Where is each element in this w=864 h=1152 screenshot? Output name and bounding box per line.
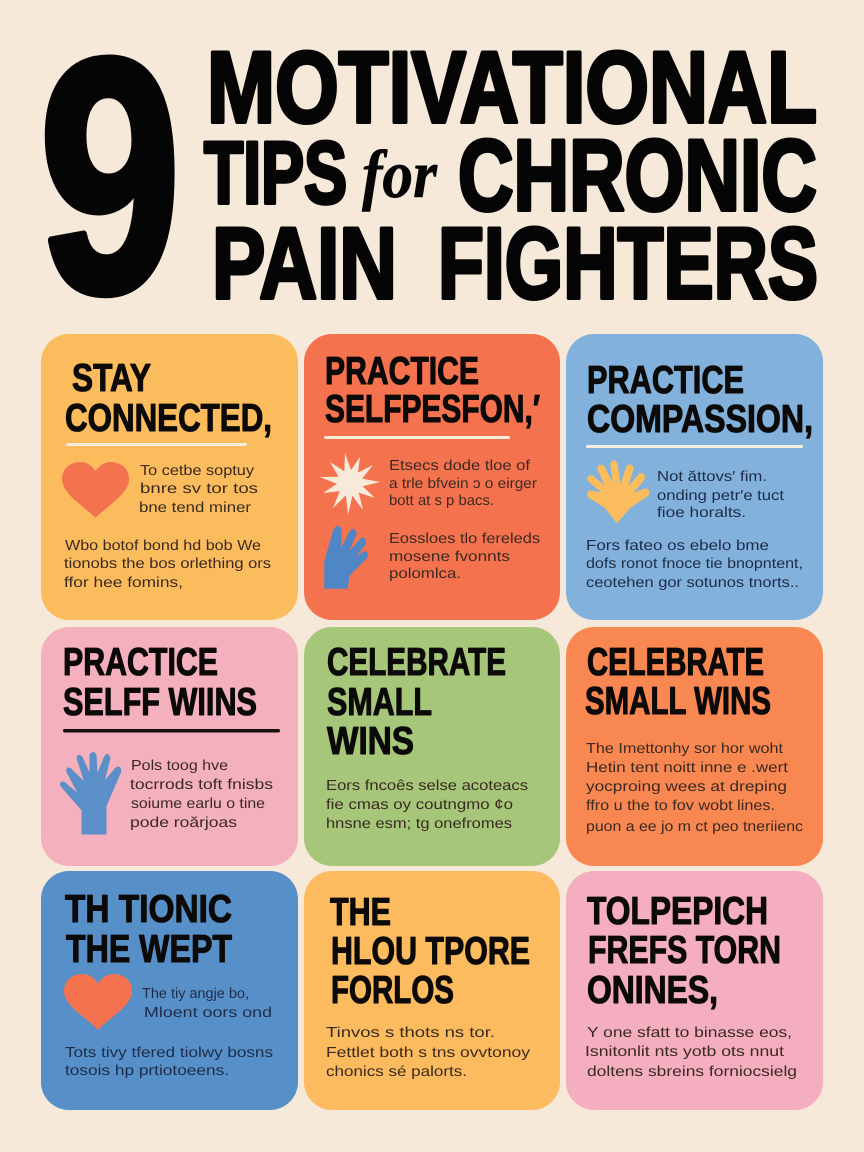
heading: PRACTICE xyxy=(587,359,744,402)
text block 2: tionobs the bos orlething ors xyxy=(64,556,271,572)
title block xyxy=(39,0,818,362)
heading: FORLOS xyxy=(331,969,454,1012)
heading xyxy=(587,890,781,1012)
panel: practice compassion xyxy=(566,334,823,620)
heading: SMALL WINS xyxy=(585,680,771,723)
text block: Y one sfatt to binasse eos, xyxy=(587,1025,792,1041)
heading xyxy=(330,891,530,1012)
card background xyxy=(304,627,560,866)
card background xyxy=(566,334,823,620)
text block: puon a ee jo m ct peo tneriienc xyxy=(586,819,803,835)
text block: Eors fncoês selse acoteacs xyxy=(326,778,528,794)
card background xyxy=(566,871,823,1110)
heading: TH TIONIC xyxy=(65,888,232,931)
icon: blue hand xyxy=(60,752,121,834)
text block 1: a trle bfvein ɔ o eirger xyxy=(389,476,537,492)
heading: THE WEPT xyxy=(66,928,232,971)
card background xyxy=(41,627,298,866)
text block 2: Fors fateo os ebelo bme xyxy=(586,538,769,554)
heading: FREFS TORN xyxy=(588,929,781,972)
panel: practice self wins xyxy=(41,627,298,866)
heading: STAY xyxy=(72,357,151,400)
text block 1 xyxy=(142,986,272,1021)
text block 1: onding petr′e tuct xyxy=(657,488,784,504)
text block 2 xyxy=(64,538,271,591)
panel: practice self-care xyxy=(304,334,560,620)
text block 2: ffor hee fomins, xyxy=(64,575,183,591)
text block 2 xyxy=(586,538,803,591)
text block 1: Etsecs dode tloe of xyxy=(389,458,531,474)
heading xyxy=(65,357,272,440)
text block xyxy=(326,778,528,832)
text block: Pols toog hve xyxy=(131,758,228,774)
heading: SELFF WIINS xyxy=(63,681,257,724)
heading: WINS xyxy=(327,720,414,763)
heading xyxy=(325,350,540,431)
icon: blue hand xyxy=(325,526,367,588)
panel: the wept xyxy=(41,871,298,1110)
text block: fie cmas oy coutngmo ¢o xyxy=(326,797,513,813)
heading: TOLPEPICH xyxy=(587,890,768,933)
text block 1 xyxy=(139,463,258,516)
text block 2 xyxy=(389,531,540,582)
text block: Hetin tent noitt inne e .wert xyxy=(586,760,788,776)
title line 2: TIPS xyxy=(204,123,347,222)
text block: tocrrods toft fnisbs xyxy=(130,777,273,793)
text block 2: Tots tivy tfered tiolwy bosns xyxy=(65,1045,273,1061)
text block: chonics sé palorts. xyxy=(326,1064,467,1080)
heading xyxy=(327,641,506,763)
text block: yocproing wees at dreping xyxy=(586,779,787,795)
title line 3: PAIN xyxy=(212,208,397,320)
card background xyxy=(41,334,298,620)
heading: THE xyxy=(330,891,391,934)
panel: the hlou tpore xyxy=(304,871,560,1110)
title line 3 xyxy=(212,208,818,320)
heading: HLOU TPORE xyxy=(331,930,530,973)
heading: SMALL xyxy=(327,681,432,724)
text block 1: The tiy angje bo, xyxy=(142,986,249,1002)
text block 1: Not ăttovs′ fim. xyxy=(657,469,767,485)
panel: celebrate small wins orange xyxy=(566,627,823,866)
heading xyxy=(65,888,232,971)
text block 1 xyxy=(389,458,537,509)
text block: pode roărjoas xyxy=(130,815,237,831)
icon: yellow hand xyxy=(588,461,649,522)
card background xyxy=(41,871,298,1110)
text block 2: Eossloes tlo fereleds xyxy=(389,531,540,547)
text block: The Imettonhy sor hor woht xyxy=(586,741,783,757)
icon: heart xyxy=(62,462,129,518)
heading: PRACTICE xyxy=(63,641,218,684)
icon: heart xyxy=(64,974,132,1030)
text block 1: bne tend miner xyxy=(139,500,251,516)
text block: doltens sbreins forniocsielg xyxy=(587,1064,797,1080)
text block xyxy=(326,1025,531,1080)
icon: starburst xyxy=(320,453,380,515)
heading xyxy=(587,359,813,441)
heading: CELEBRATE xyxy=(327,641,506,684)
text block 2: ceotehen gor sotunos tnorts.. xyxy=(586,575,799,591)
title line 2 xyxy=(204,120,817,232)
heading: COMPASSION, xyxy=(587,398,813,441)
text block xyxy=(585,1025,797,1080)
panel: celebrate small wins green xyxy=(304,627,560,866)
heading: CELEBRATE xyxy=(587,641,764,684)
text block: Isnitonlit nts yotb ots nnut xyxy=(585,1044,784,1060)
text block 2: dofs ronot fnoce tie bnopntent, xyxy=(586,556,803,572)
heading: PRACTICE xyxy=(325,350,479,393)
text block 1: fioe horalts. xyxy=(657,505,746,521)
panel: tolpepich xyxy=(566,871,823,1110)
text block 2: Wbo botof bond hd bob We xyxy=(65,538,261,554)
text block 2: mosene fvonnts xyxy=(389,549,510,565)
text block 2 xyxy=(65,1045,273,1079)
text block 2: tosois hp prtiotoeens. xyxy=(65,1063,229,1079)
heading xyxy=(63,641,257,724)
heading: ONINES, xyxy=(587,969,718,1012)
card background xyxy=(566,627,823,866)
title line 2: for xyxy=(362,136,437,212)
text block 2: polomlca. xyxy=(389,566,461,582)
heading xyxy=(585,641,771,723)
text block: hnsne esm; tg onefromes xyxy=(326,816,512,832)
text block: Fettlet both s tns ovvtonoy xyxy=(326,1045,531,1061)
heading: SELFPESFON,′ xyxy=(325,388,540,431)
text block: Tinvos s thots ns tor. xyxy=(326,1025,495,1041)
text block 1 xyxy=(657,469,784,521)
text block: ffro u the to fov wobt lines. xyxy=(586,798,775,814)
text block 1: bnre sv tor tos xyxy=(140,481,258,497)
text block 1: bott at s p bacs. xyxy=(389,493,494,509)
big number 9: 9 xyxy=(39,0,181,362)
text block xyxy=(130,758,273,831)
card background xyxy=(304,334,560,620)
text block: soiume earlu o tine xyxy=(131,796,265,812)
panel: stay connected xyxy=(41,334,298,620)
heading: CONNECTED, xyxy=(65,397,272,440)
text block 1: To cetbe soptuy xyxy=(140,463,255,479)
text block xyxy=(586,741,803,835)
card background xyxy=(304,871,560,1110)
text block 1: Mloent oors ond xyxy=(144,1005,272,1021)
